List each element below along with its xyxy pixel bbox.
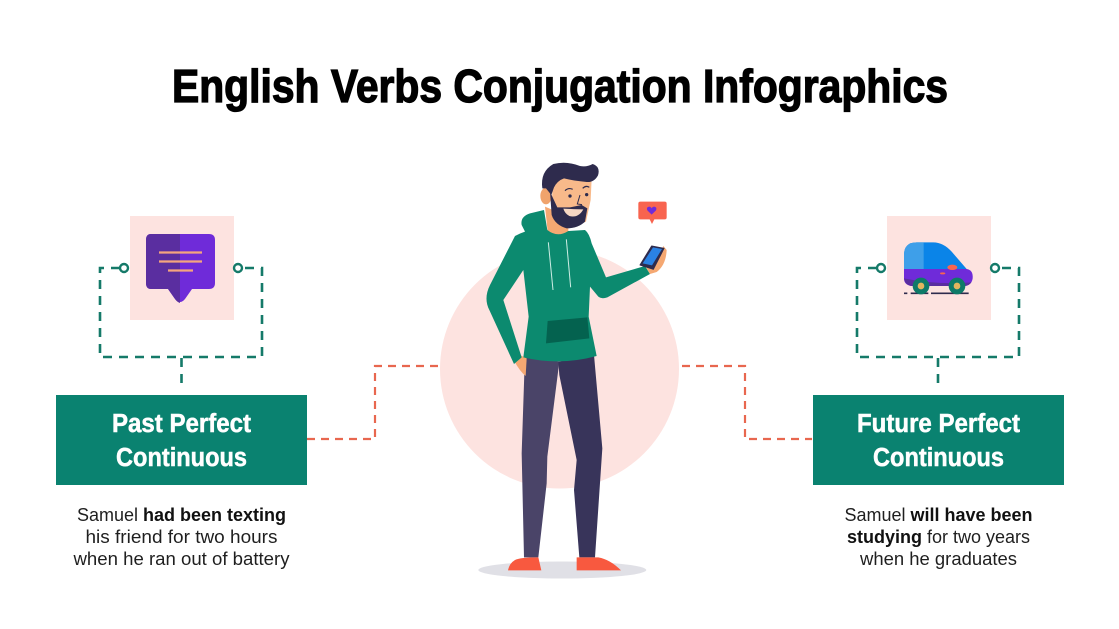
beard (550, 192, 587, 228)
smile (563, 209, 583, 216)
heading: Past Perfect (112, 410, 251, 438)
dashed frame (100, 268, 262, 357)
panel: past perfect continuous: when he ran out of battery (72, 549, 290, 569)
icon: car (904, 242, 973, 294)
phone (640, 246, 664, 269)
title: English Verbs Conjugation Infographics (172, 60, 948, 112)
heading: Future Perfect (857, 410, 1020, 438)
panel: future perfect continuous: when he graduates (859, 549, 1017, 569)
description: Samuel will have been (844, 505, 1033, 525)
ground shadow (478, 562, 646, 578)
hoodie body and arms (486, 210, 650, 364)
panel: future perfect continuous: Continuous (873, 444, 1004, 472)
left connector: red dashed (307, 366, 438, 439)
legs and shoes (508, 353, 621, 570)
hand (645, 246, 667, 274)
panel: past perfect continuous (56, 216, 307, 569)
panel: past perfect continuous: Continuous (116, 444, 247, 472)
heading box (813, 395, 1064, 485)
hair (542, 163, 599, 195)
character (478, 163, 667, 578)
right connector: red dashed (682, 366, 812, 439)
panel: future perfect continuous (813, 216, 1064, 569)
dashed frame (857, 268, 1019, 357)
heading box (56, 395, 307, 485)
panel: future perfect continuous: studying for two years (847, 527, 1030, 547)
upper body (486, 163, 667, 364)
neck (545, 207, 568, 237)
heart bubble (638, 202, 667, 224)
icon tile (887, 216, 991, 320)
ear (540, 188, 552, 204)
drawstrings (548, 239, 571, 290)
eyes and nose (565, 186, 589, 191)
icon tile (130, 216, 234, 320)
face (552, 175, 592, 226)
background circle (440, 250, 679, 488)
icon: speech bubble (146, 234, 215, 303)
description: Samuel had been texting (77, 505, 286, 525)
pocket (546, 317, 589, 343)
panel: past perfect continuous: his friend for two hours (86, 527, 278, 547)
